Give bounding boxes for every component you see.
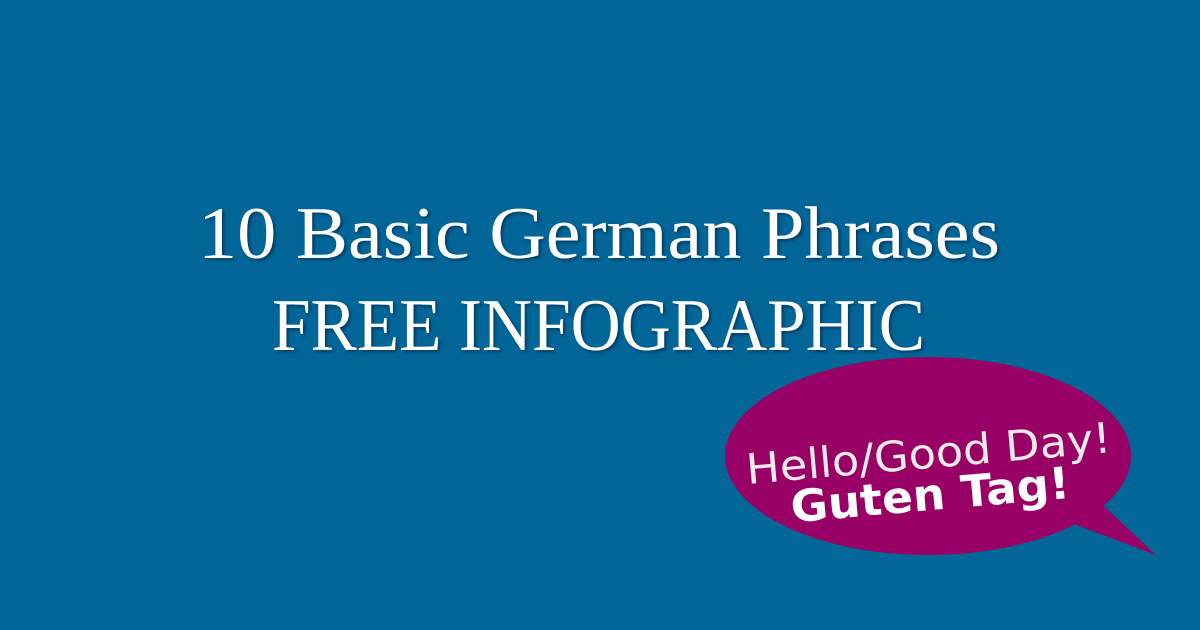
bubble text bbox=[744, 413, 1117, 537]
title line 2: FREE INFOGRAPHIC bbox=[272, 285, 925, 367]
bubble text: Hello/Good Day! bbox=[744, 413, 1113, 494]
callout: speech bubble bbox=[725, 357, 1156, 555]
bubble body bbox=[725, 357, 1131, 555]
bubble tail bbox=[1050, 495, 1156, 555]
title line 1: 10 Basic German Phrases bbox=[198, 193, 1000, 275]
title bbox=[198, 193, 1000, 367]
bubble text: Guten Tag! bbox=[789, 458, 1072, 533]
